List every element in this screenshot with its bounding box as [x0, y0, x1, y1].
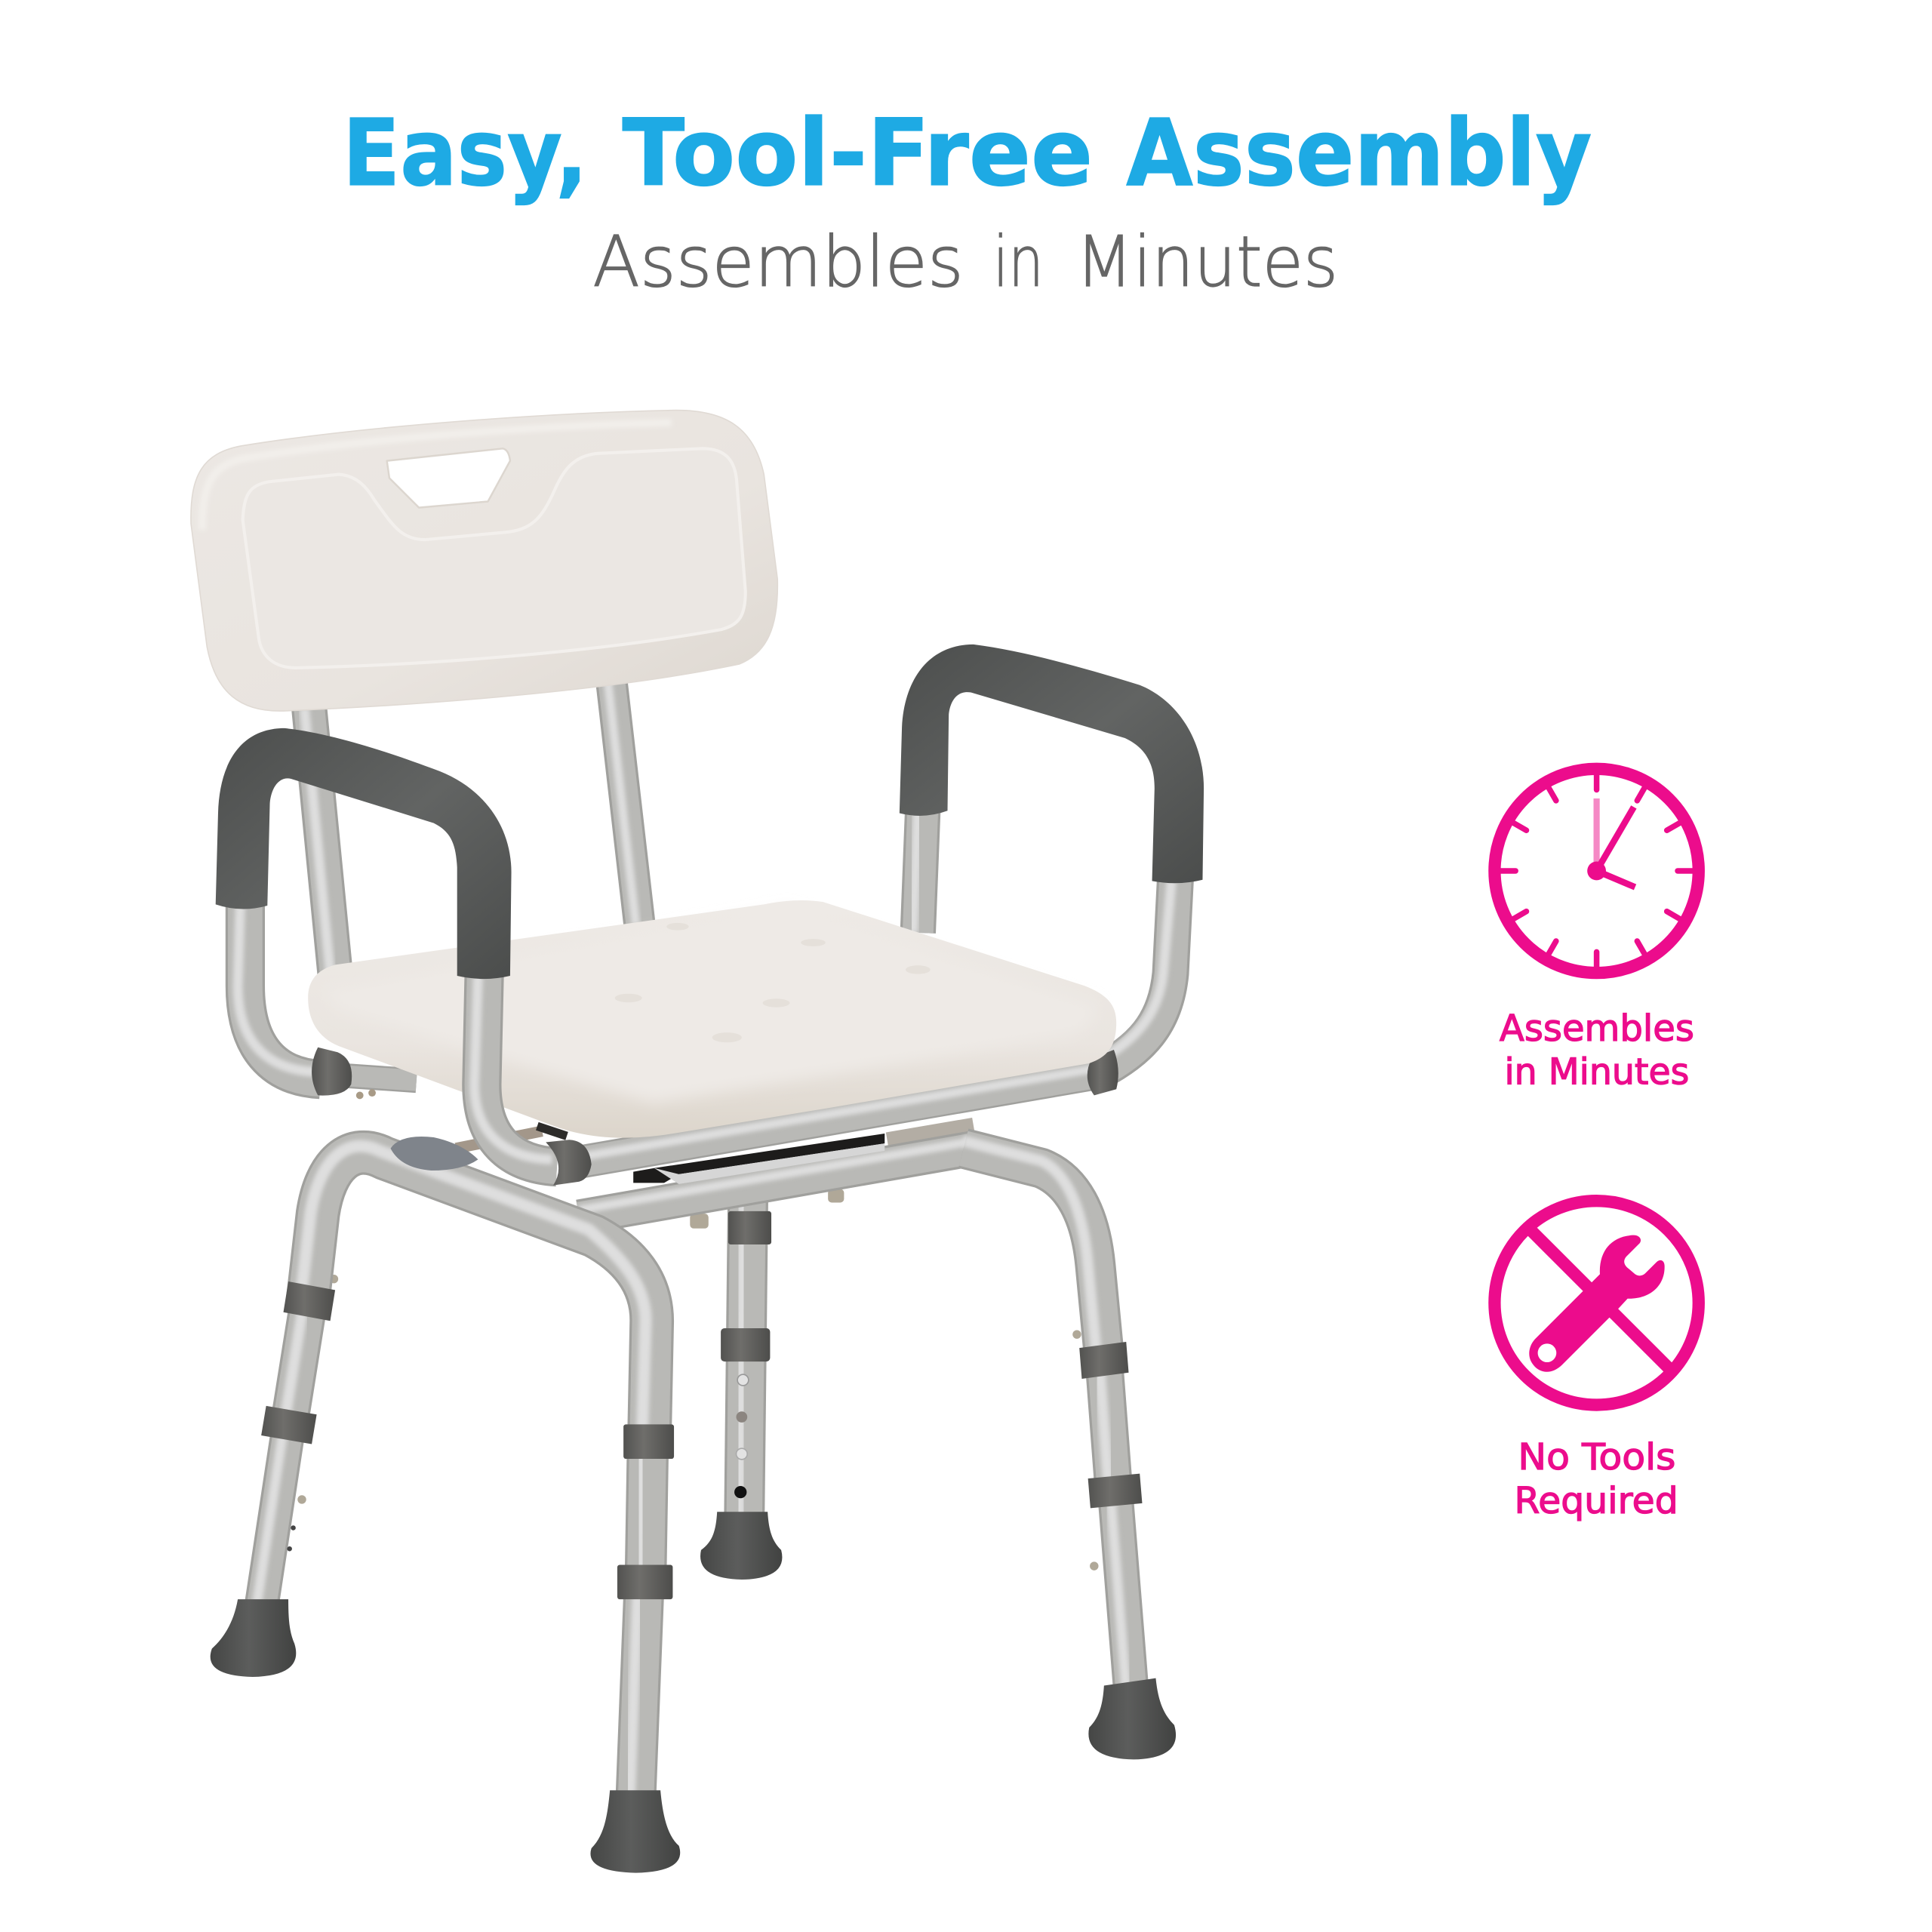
label: assembles in minutes: in Minutes [1504, 1051, 1689, 1094]
subtitle: Assembles [592, 221, 964, 303]
back support posts [304, 678, 639, 974]
far arm support [900, 645, 1204, 1072]
base frame and legs [211, 1125, 1176, 1873]
label: assembles in minutes [1500, 1008, 1694, 1094]
title [343, 99, 1592, 207]
seat drain dimples [615, 923, 931, 1042]
icon: clock [1494, 769, 1699, 973]
seat [308, 900, 1116, 1138]
front cross rail [579, 1149, 974, 1217]
wrench [1529, 1235, 1665, 1372]
swivel plate [633, 1134, 884, 1184]
front leg [590, 1424, 680, 1873]
clock tick marks [1501, 775, 1693, 967]
left rear leg and side rail [211, 1146, 652, 1677]
right leg [964, 1141, 1176, 1759]
near arm pad [216, 728, 512, 979]
shower chair illustration [191, 411, 1204, 1873]
label: no tools required: No Tools [1518, 1436, 1675, 1478]
subtitle: in [993, 221, 1044, 303]
crossed-out bar [1527, 1227, 1669, 1367]
rear centre leg [700, 1201, 782, 1580]
backrest rim highlight [202, 423, 672, 530]
far arm pad [900, 645, 1204, 883]
subtitle [592, 221, 1338, 303]
backrest handle opening [387, 448, 510, 508]
swivel slat [456, 1131, 542, 1149]
label: assembles in minutes: Assembles [1500, 1008, 1694, 1050]
back frame rail [888, 1125, 974, 1140]
clock hands [1587, 807, 1635, 888]
icon: no tools [1494, 1201, 1699, 1405]
label: no tools required: Required [1515, 1480, 1678, 1522]
seat rail and connectors [573, 1050, 1118, 1163]
subtitle: Minutes [1075, 221, 1338, 303]
backrest inset panel [243, 448, 746, 668]
seat top surface [323, 909, 1097, 1103]
release lever [391, 1137, 478, 1171]
bolts [297, 1189, 1099, 1571]
title: Tool-Free [622, 99, 1093, 207]
clock previous minute hand [1595, 798, 1598, 865]
near arm outer tube [238, 903, 417, 1099]
label: no tools required [1515, 1436, 1678, 1522]
title: Assembly [1126, 99, 1592, 207]
backrest [191, 411, 777, 711]
near arm [216, 728, 592, 1186]
title: Easy, [343, 99, 588, 207]
